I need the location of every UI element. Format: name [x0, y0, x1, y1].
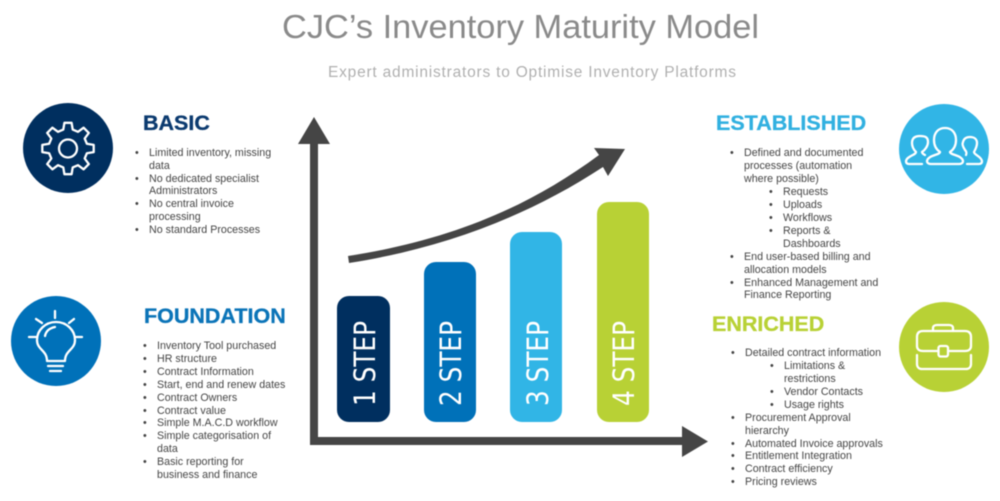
panel: foundation	[143, 304, 286, 481]
list: enriched: •	[731, 347, 735, 359]
list: established	[730, 147, 878, 301]
icon: briefcase	[899, 302, 989, 392]
list: enriched: Contract efficiency	[745, 463, 833, 475]
list: enriched: hierarchy	[745, 425, 790, 437]
list: established: •	[730, 277, 734, 289]
panel: basic	[135, 111, 271, 236]
icon: light bulb	[11, 296, 101, 386]
list: enriched: restrictions	[784, 373, 836, 385]
list: established: •	[769, 199, 773, 211]
list: enriched: •	[770, 386, 774, 398]
list: foundation: HR structure	[157, 353, 217, 365]
bar: 3 step	[510, 232, 562, 422]
list: foundation: •	[143, 417, 147, 429]
heading: basic: BASIC	[143, 111, 210, 135]
title: CJC’s Inventory Maturity Model	[282, 8, 759, 45]
list: established: Defined and documented	[744, 147, 863, 159]
list: enriched: •	[731, 412, 735, 424]
list: foundation: •	[143, 392, 147, 404]
list: foundation: Simple M.A.C.D workflow	[157, 417, 278, 429]
bar: 1 step	[337, 296, 390, 422]
list: established: End user-based billing and	[744, 251, 871, 263]
list: basic: •	[135, 198, 139, 210]
list: established: •	[730, 147, 734, 159]
list: established: processes (automation	[744, 160, 852, 172]
arrow: vertical axis	[298, 117, 330, 437]
list: foundation: Basic reporting for	[157, 456, 244, 468]
bar: 2 step	[424, 262, 476, 422]
list: foundation: Inventory Tool purchased	[157, 340, 276, 352]
subtitle: Expert administrators to Optimise Inventory Platforms	[328, 64, 736, 81]
arrow: horizontal axis	[310, 426, 708, 457]
list: established: •	[769, 186, 773, 198]
icon: people	[899, 104, 989, 194]
list: established: Dashboards	[783, 238, 841, 250]
list: basic: No standard Processes	[149, 224, 260, 236]
list: basic: processing	[149, 211, 201, 223]
list: foundation: Simple categorisation of	[157, 430, 271, 442]
list: enriched: Usage rights	[784, 399, 844, 411]
list: foundation: business and finance	[157, 469, 257, 481]
list: basic: Administrators	[149, 185, 217, 197]
list: enriched: •	[731, 438, 735, 450]
list: enriched	[731, 347, 883, 488]
list: established: Requests	[783, 186, 828, 198]
list: enriched: •	[770, 360, 774, 372]
list: foundation: data	[157, 443, 178, 455]
list: enriched: Limitations &	[784, 360, 845, 372]
list: established: Finance Reporting	[744, 289, 831, 301]
arrow: growth curve	[348, 148, 625, 263]
list: established: •	[769, 212, 773, 224]
list: established: Enhanced Management and	[744, 277, 878, 289]
list: foundation: •	[143, 379, 147, 391]
list: foundation: •	[143, 430, 147, 442]
bar: 4 step	[597, 202, 649, 422]
heading: established: ESTABLISHED	[716, 111, 866, 135]
list: enriched: Pricing reviews	[745, 476, 817, 488]
list: foundation: •	[143, 353, 147, 365]
bar: 4 step: 4 STEP	[607, 321, 641, 406]
list: basic: No dedicated specialist	[149, 173, 259, 185]
list: established: allocation models	[744, 264, 827, 276]
list: foundation: Contract Owners	[157, 392, 237, 404]
list: enriched: Vendor Contacts	[784, 386, 863, 398]
icon: gear	[23, 103, 113, 193]
list: basic: •	[135, 173, 139, 185]
list: enriched: Detailed contract information	[745, 347, 881, 359]
panel: enriched	[712, 312, 883, 488]
list: foundation: •	[143, 340, 147, 352]
list: foundation	[143, 340, 285, 481]
list: established: •	[769, 225, 773, 237]
list: foundation: Contract value	[157, 405, 226, 417]
list: established: •	[730, 251, 734, 263]
bar: 2 step: 2 STEP	[434, 321, 468, 406]
list: foundation: Contract Information	[157, 366, 254, 378]
list: enriched: Automated Invoice approvals	[745, 438, 883, 450]
bar: 3 step: 3 STEP	[521, 321, 555, 406]
list: basic: data	[149, 160, 170, 172]
list: enriched: •	[731, 476, 735, 488]
list: foundation: Start, end and renew dates	[157, 379, 285, 391]
list: established: Workflows	[783, 212, 832, 224]
list: established: Reports &	[783, 225, 831, 237]
bar chart: steps	[337, 202, 649, 422]
list: foundation: •	[143, 366, 147, 378]
list: foundation: •	[143, 456, 147, 468]
list: enriched: •	[731, 463, 735, 475]
list: established: where possible)	[743, 173, 819, 185]
bar: 1 step: 1 STEP	[348, 321, 382, 406]
list: basic: •	[135, 147, 139, 159]
list: basic	[135, 147, 271, 236]
list: established: Uploads	[783, 199, 822, 211]
list: foundation: •	[143, 405, 147, 417]
panel: established	[716, 111, 878, 301]
list: enriched: •	[770, 399, 774, 411]
heading: foundation: FOUNDATION	[144, 304, 286, 328]
heading: enriched: ENRICHED	[712, 312, 824, 336]
list: enriched: •	[731, 450, 735, 462]
list: enriched: Entitlement Integration	[745, 450, 852, 462]
list: basic: Limited inventory, missing	[149, 147, 271, 159]
list: basic: No central invoice	[149, 198, 234, 210]
list: basic: •	[135, 224, 139, 236]
list: enriched: Procurement Approval	[745, 412, 851, 424]
